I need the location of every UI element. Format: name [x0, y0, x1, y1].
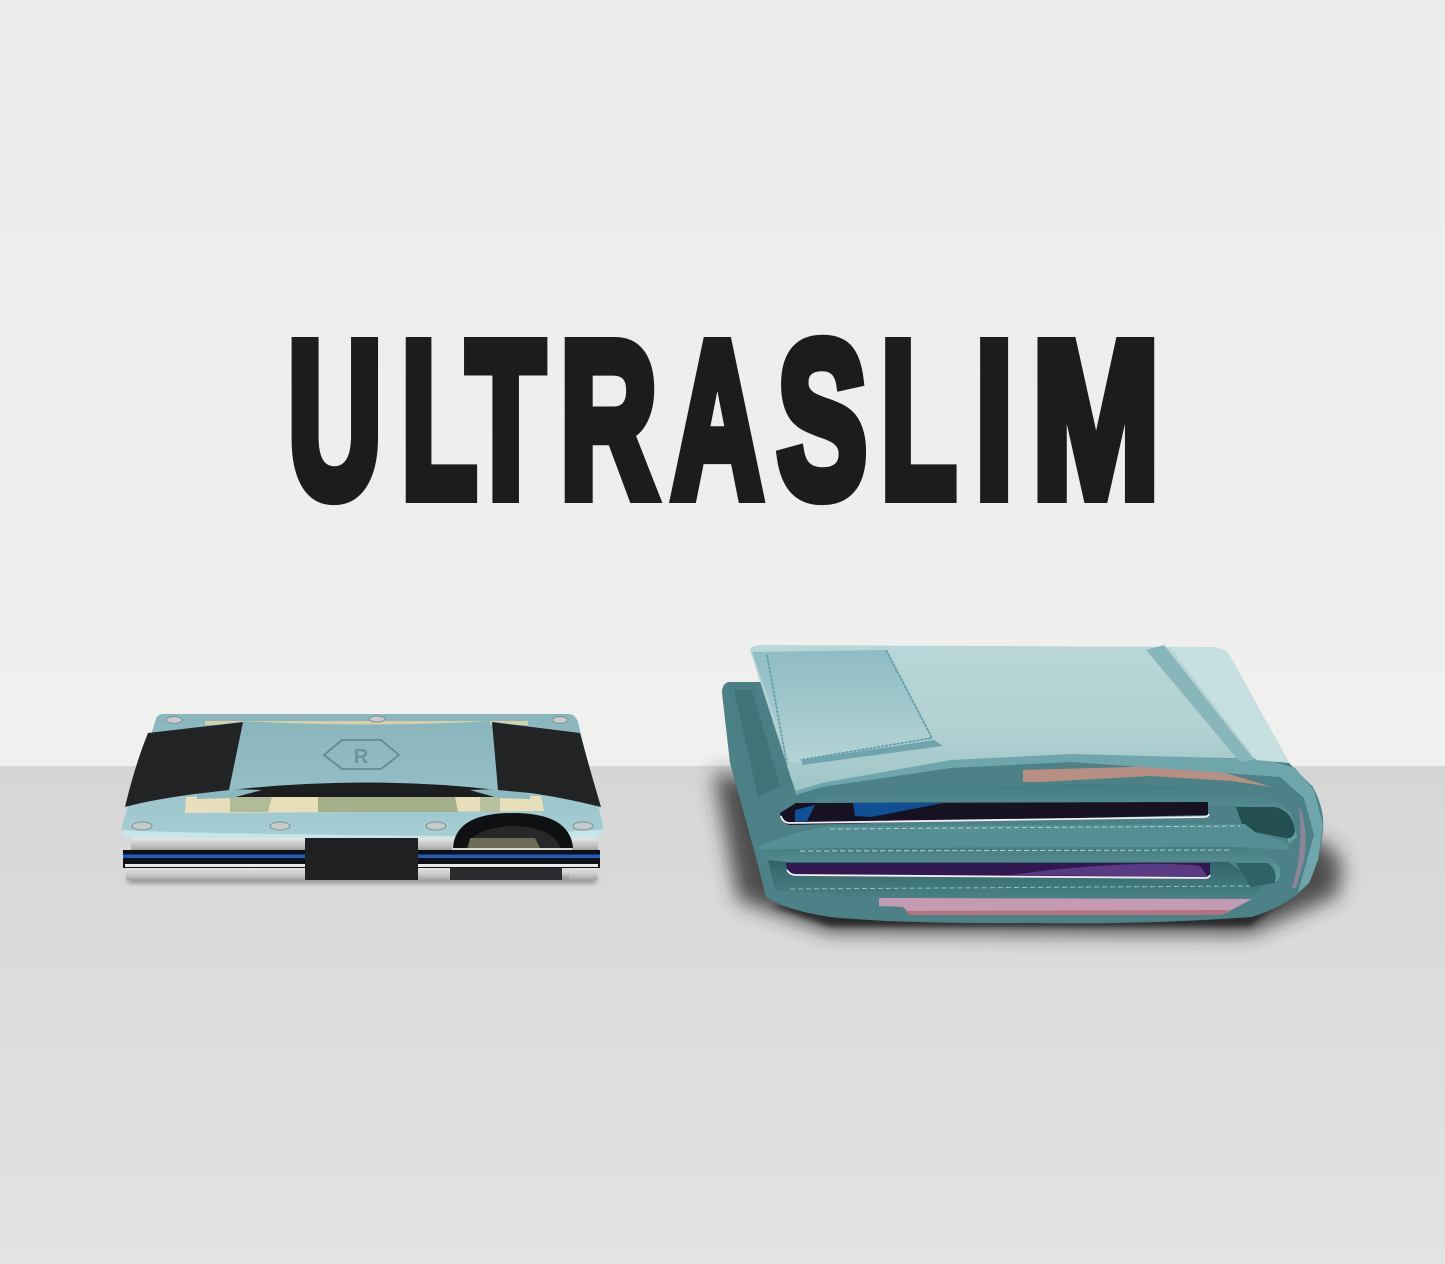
slim metal wallet	[122, 714, 603, 883]
title: T	[467, 296, 545, 543]
black slot top	[290, 724, 445, 730]
strap tab	[752, 650, 943, 763]
middle leather band	[758, 824, 1290, 858]
contact shadow	[770, 895, 1290, 926]
lower card slot	[786, 863, 1210, 877]
leather bifold wallet	[714, 645, 1342, 934]
right strap	[1146, 645, 1254, 762]
card white edge	[781, 814, 1209, 823]
lower card highlight	[1010, 864, 1208, 877]
cash in slot	[468, 838, 540, 848]
cash under clip	[185, 796, 544, 813]
top cash	[1023, 765, 1272, 787]
left pocket shade	[734, 690, 780, 797]
title: L	[401, 296, 477, 543]
wallet shadow	[128, 876, 596, 883]
title: M	[1032, 296, 1160, 543]
center elastic band	[305, 838, 418, 880]
money clip body	[229, 721, 498, 790]
logo letter: R	[354, 746, 369, 768]
fold stitch line lower	[800, 850, 1230, 851]
cash top edge	[205, 721, 528, 725]
clip lower slot	[229, 781, 498, 797]
card art blue	[795, 803, 943, 822]
screws	[132, 716, 593, 830]
wallet body	[722, 660, 1323, 923]
wallet shadow	[714, 772, 1342, 934]
title: I	[975, 296, 1013, 543]
background floor	[0, 766, 1445, 1264]
upper leather band	[815, 784, 1297, 844]
cash print	[230, 797, 500, 812]
title: U	[288, 296, 382, 543]
lower curl inner	[1236, 863, 1276, 887]
card peek in slot	[466, 826, 560, 848]
bottom stitch	[790, 886, 1250, 889]
fold stitch line upper	[830, 826, 1240, 829]
card thumb slot	[453, 813, 573, 848]
upper card slot	[780, 802, 1208, 825]
lower pocket	[768, 860, 1262, 899]
bottom cash	[879, 898, 1252, 915]
right flap highlight	[1170, 647, 1289, 763]
tab stitching	[767, 650, 932, 765]
right elastic band	[492, 722, 601, 807]
title: L	[881, 296, 956, 543]
plate bright edge	[122, 830, 603, 838]
metal sides	[123, 838, 600, 880]
title: S	[777, 296, 867, 543]
left elastic band	[125, 722, 243, 807]
cash print	[905, 910, 1230, 915]
logo hexagon	[324, 740, 399, 769]
title: A	[672, 296, 763, 543]
clip left tab	[197, 789, 262, 799]
title: R	[560, 296, 657, 543]
top flap	[750, 645, 1289, 791]
clip right tab	[470, 789, 530, 799]
lower card white edge	[787, 870, 1210, 878]
left pocket	[728, 682, 792, 800]
page edges	[1292, 805, 1306, 888]
top plate	[122, 714, 603, 838]
background wall	[0, 0, 1445, 766]
lower leather band	[760, 847, 1280, 884]
upper curl inner	[1236, 807, 1295, 838]
flap lip edge	[792, 752, 1323, 892]
tab lip	[802, 740, 943, 765]
